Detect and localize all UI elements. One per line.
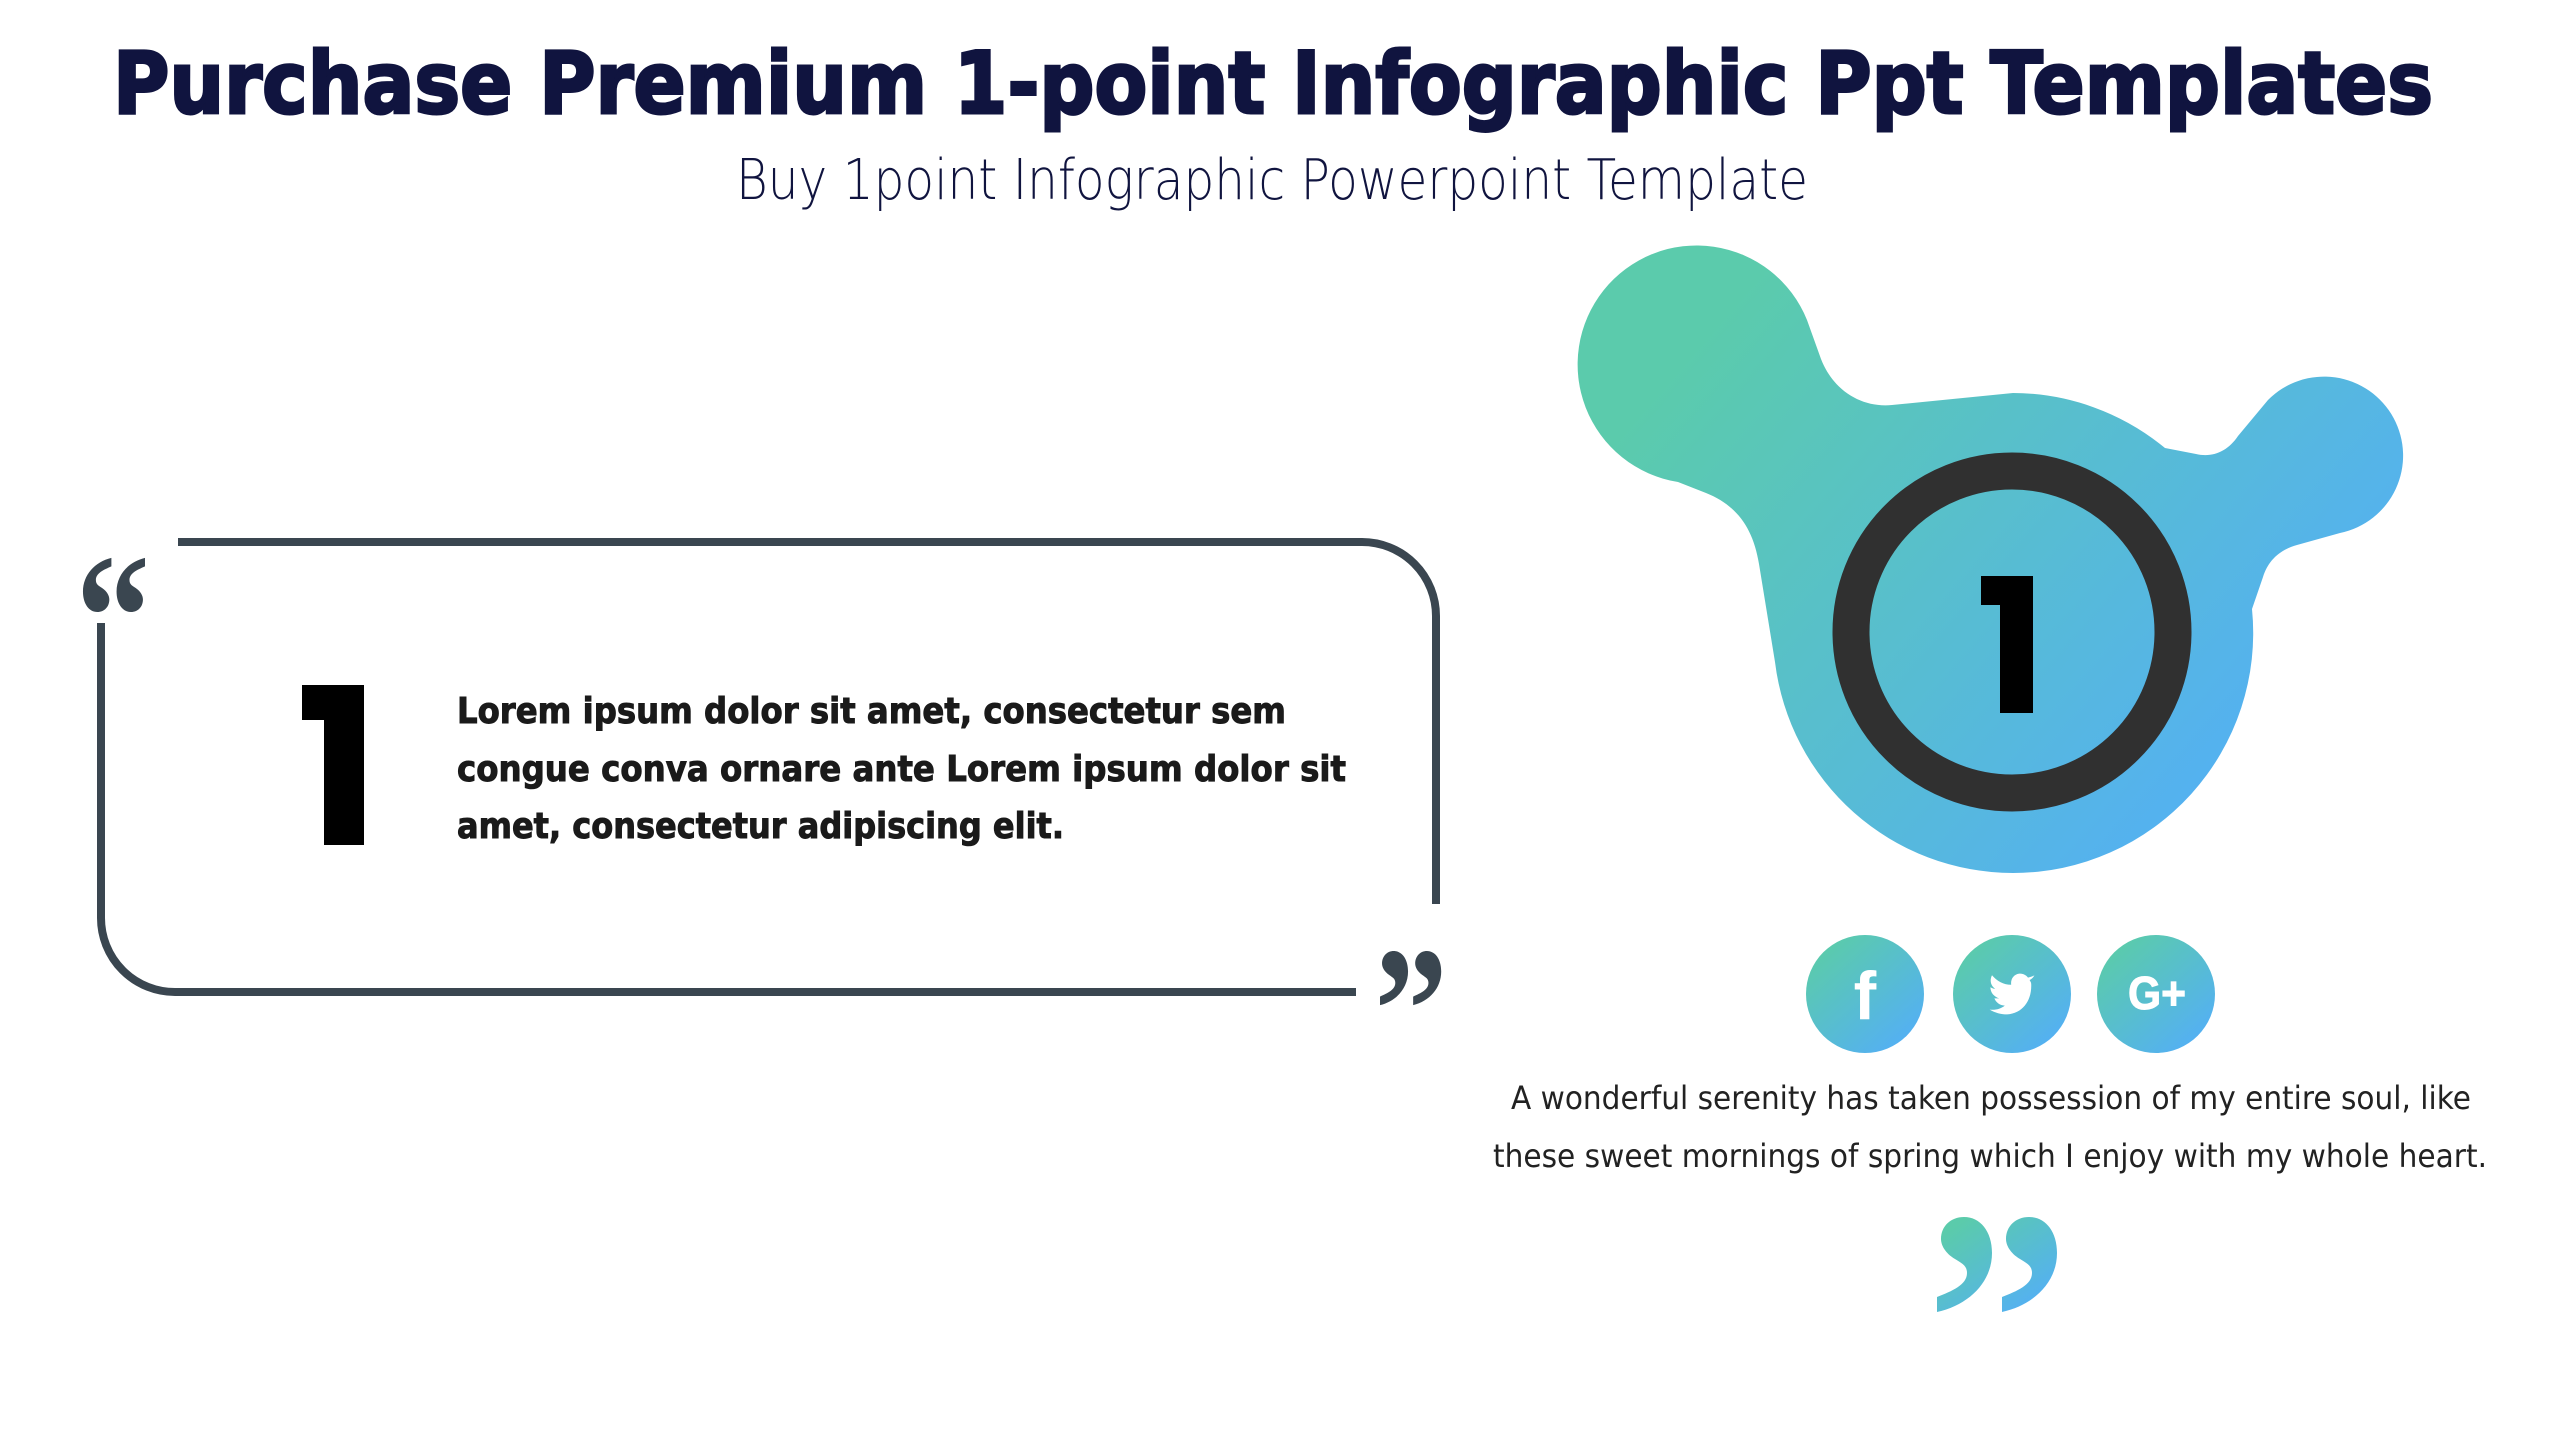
- panel: quote frame: [83, 542, 1441, 1005]
- text block: caption: A wonderful serenity has taken possession of my entire soul, like: [1511, 1079, 2471, 1117]
- gradient blob shape: [1578, 245, 2403, 873]
- large numeral 1: 1: [261, 621, 405, 911]
- icon: gradient closing quote: [1937, 1217, 2057, 1312]
- icon: twitter: [1953, 935, 2071, 1053]
- icon: facebook: f: [1854, 958, 1877, 1034]
- ring numeral 1: 1: [1943, 514, 2071, 771]
- icon: google plus: [2097, 935, 2215, 1053]
- frame border: [101, 542, 1436, 992]
- text block: lorem ipsum: Lorem ipsum dolor sit amet, consectetur sem: [457, 691, 1286, 732]
- subtitle: Buy 1point Infographic Powerpoint Template: [736, 148, 1808, 213]
- ring: [1851, 471, 2173, 793]
- icon: opening quote: [83, 558, 145, 612]
- text block: lorem ipsum: amet, consectetur adipiscing elit.: [457, 806, 1064, 847]
- text block: lorem ipsum: congue conva ornare ante Lorem ipsum dolor sit: [457, 749, 1346, 790]
- text block: lorem ipsum: [457, 691, 1346, 847]
- icon: closing quote: [1380, 951, 1441, 1005]
- text block: caption: these sweet mornings of spring which I enjoy with my whole heart.: [1493, 1137, 2487, 1175]
- blob badge: [1578, 245, 2403, 873]
- text block: caption: [1493, 1079, 2487, 1175]
- icon: google plus: G+: [2128, 967, 2186, 1019]
- icon: facebook: [1806, 935, 1924, 1053]
